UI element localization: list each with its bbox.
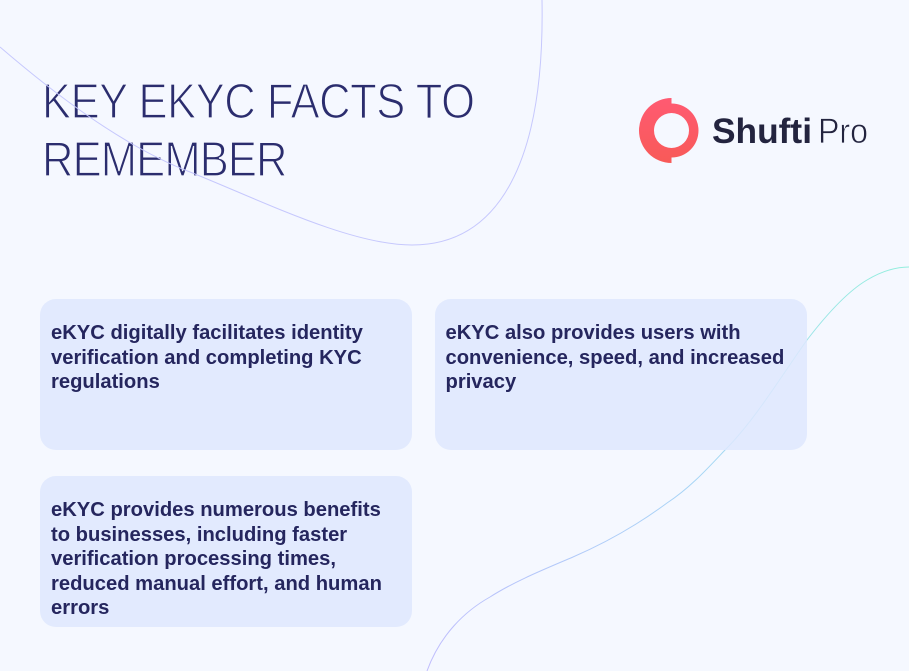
text: digital verification: eKYC digitally facilitates identity (51, 322, 363, 344)
text: digital verification: regulations (51, 371, 160, 393)
wordmark: Shufti (712, 112, 812, 151)
text: user benefits: eKYC also provides users with (446, 322, 741, 344)
text: user benefits: convenience, speed, and increased (446, 346, 784, 368)
text: user benefits (446, 322, 784, 393)
panel: business benefits (40, 476, 412, 627)
text: business benefits: to businesses, including faster (51, 524, 347, 546)
icon: logo ring (639, 98, 698, 163)
panel: digital verification (40, 299, 412, 450)
title: KEY EKYC FACTS TO (42, 73, 475, 129)
text: business benefits (51, 499, 382, 619)
wordmark: Pro (818, 112, 868, 151)
text: business benefits: reduced manual effort, and human (51, 572, 382, 594)
text: digital verification (51, 322, 363, 393)
title: REMEMBER (42, 131, 288, 187)
panel: user benefits (435, 299, 807, 450)
text: business benefits: eKYC provides numerous benefits (51, 499, 381, 521)
text: business benefits: errors (51, 597, 109, 619)
text: user benefits: privacy (446, 371, 516, 393)
text: business benefits: verification processing times, (51, 548, 336, 570)
wordmark (712, 112, 868, 151)
text: digital verification: verification and completing KYC (51, 346, 362, 368)
